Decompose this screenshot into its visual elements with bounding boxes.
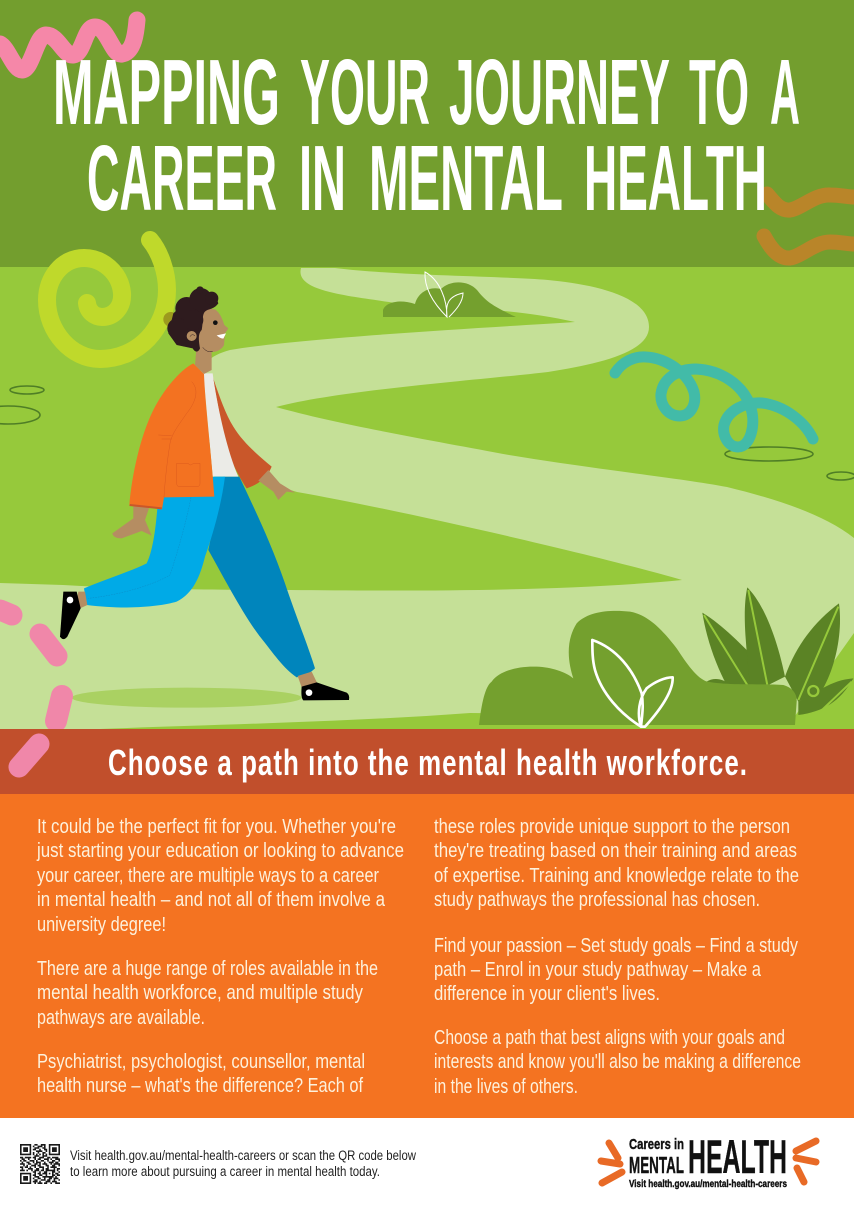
panel: red banner	[0, 729, 854, 794]
text column: right: in the lives of others.	[434, 1076, 578, 1098]
squiggle: brown lower	[764, 236, 854, 258]
winding path	[0, 268, 854, 729]
text column: right: path – Enrol in your study pathway – Make a	[434, 959, 762, 981]
text column: right: difference in your client's lives.	[434, 983, 660, 1005]
shirt	[203, 373, 238, 477]
spiky leaves	[702, 587, 853, 715]
infographic poster: A	[770, 40, 800, 144]
squiggle: yellow spiral	[47, 240, 167, 359]
pink pill on banner	[19, 744, 39, 767]
text column: left: pathways are available.	[37, 1007, 205, 1029]
title: MAPPING	[53, 40, 280, 144]
back arm	[213, 377, 295, 500]
text column: left: There are a huge range of roles available in the	[37, 958, 378, 980]
large bush with leaves	[479, 587, 853, 727]
text column: left: Psychiatrist, psychologist, counsellor, mental	[37, 1051, 365, 1073]
front hand	[112, 503, 152, 538]
figure: person walking	[60, 286, 349, 708]
head	[163, 286, 228, 374]
squiggle: pink	[0, 20, 137, 70]
title: CAREER	[87, 126, 277, 230]
jacket	[129, 363, 214, 509]
footer text	[70, 1148, 416, 1179]
squiggle: brown upper	[767, 194, 854, 210]
text column: left: in mental health – and not all of them involve a	[37, 889, 386, 911]
footer text: to learn more about pursuing a career in mental health today.	[70, 1164, 380, 1179]
title: IN	[299, 126, 346, 230]
text column: right: they're treating based on their training and areas	[434, 840, 797, 862]
banner heading: Choose a path into the mental health workforce.	[108, 743, 747, 783]
ground ellipses	[0, 386, 854, 480]
logo wordmark: Visit health.gov.au/mental-health-careers	[629, 1178, 787, 1190]
rear foot	[60, 592, 87, 639]
logo: Careers in Mental Health	[601, 1130, 816, 1190]
panel: landscape illustration	[0, 267, 854, 732]
small distant bush	[383, 272, 516, 317]
shadow	[72, 688, 302, 708]
title: TO	[689, 40, 749, 144]
title: YOUR	[300, 40, 430, 144]
text column: left: just starting your education or looking to advance	[36, 840, 404, 862]
curly hair	[167, 286, 218, 352]
text column: left: your career, there are multiple ways to a career	[37, 865, 379, 887]
text column: left: health nurse – what's the difference? Each of	[37, 1075, 363, 1097]
logo wordmark	[629, 1130, 787, 1190]
footer text: Visit health.gov.au/mental-health-careers or scan the QR code below	[70, 1148, 416, 1163]
text column: left	[36, 816, 404, 1097]
title	[53, 40, 800, 230]
panel: orange text panel	[0, 794, 854, 1118]
panel: header band	[0, 0, 854, 267]
logo wordmark: MENTAL	[629, 1152, 684, 1178]
text column: left: It could be the perfect fit for you. Whether you're	[37, 816, 396, 838]
QR code	[20, 1145, 60, 1183]
squiggle: teal spring	[615, 357, 813, 447]
front foot	[298, 672, 349, 700]
text column: right: these roles provide unique support to the person	[434, 816, 790, 838]
text column: right	[434, 816, 801, 1098]
text column: left: university degree!	[37, 914, 166, 936]
text column: right: study pathways the professional has chosen.	[434, 889, 760, 911]
front leg	[84, 477, 225, 607]
title: MENTAL	[369, 126, 563, 230]
back leg	[208, 477, 315, 677]
panel: footer	[0, 1118, 854, 1208]
text column: left: mental health workforce, and multiple study	[37, 982, 363, 1004]
logo wordmark: Careers in	[629, 1136, 684, 1153]
pink pills	[0, 610, 62, 721]
logo rays	[601, 1141, 816, 1183]
